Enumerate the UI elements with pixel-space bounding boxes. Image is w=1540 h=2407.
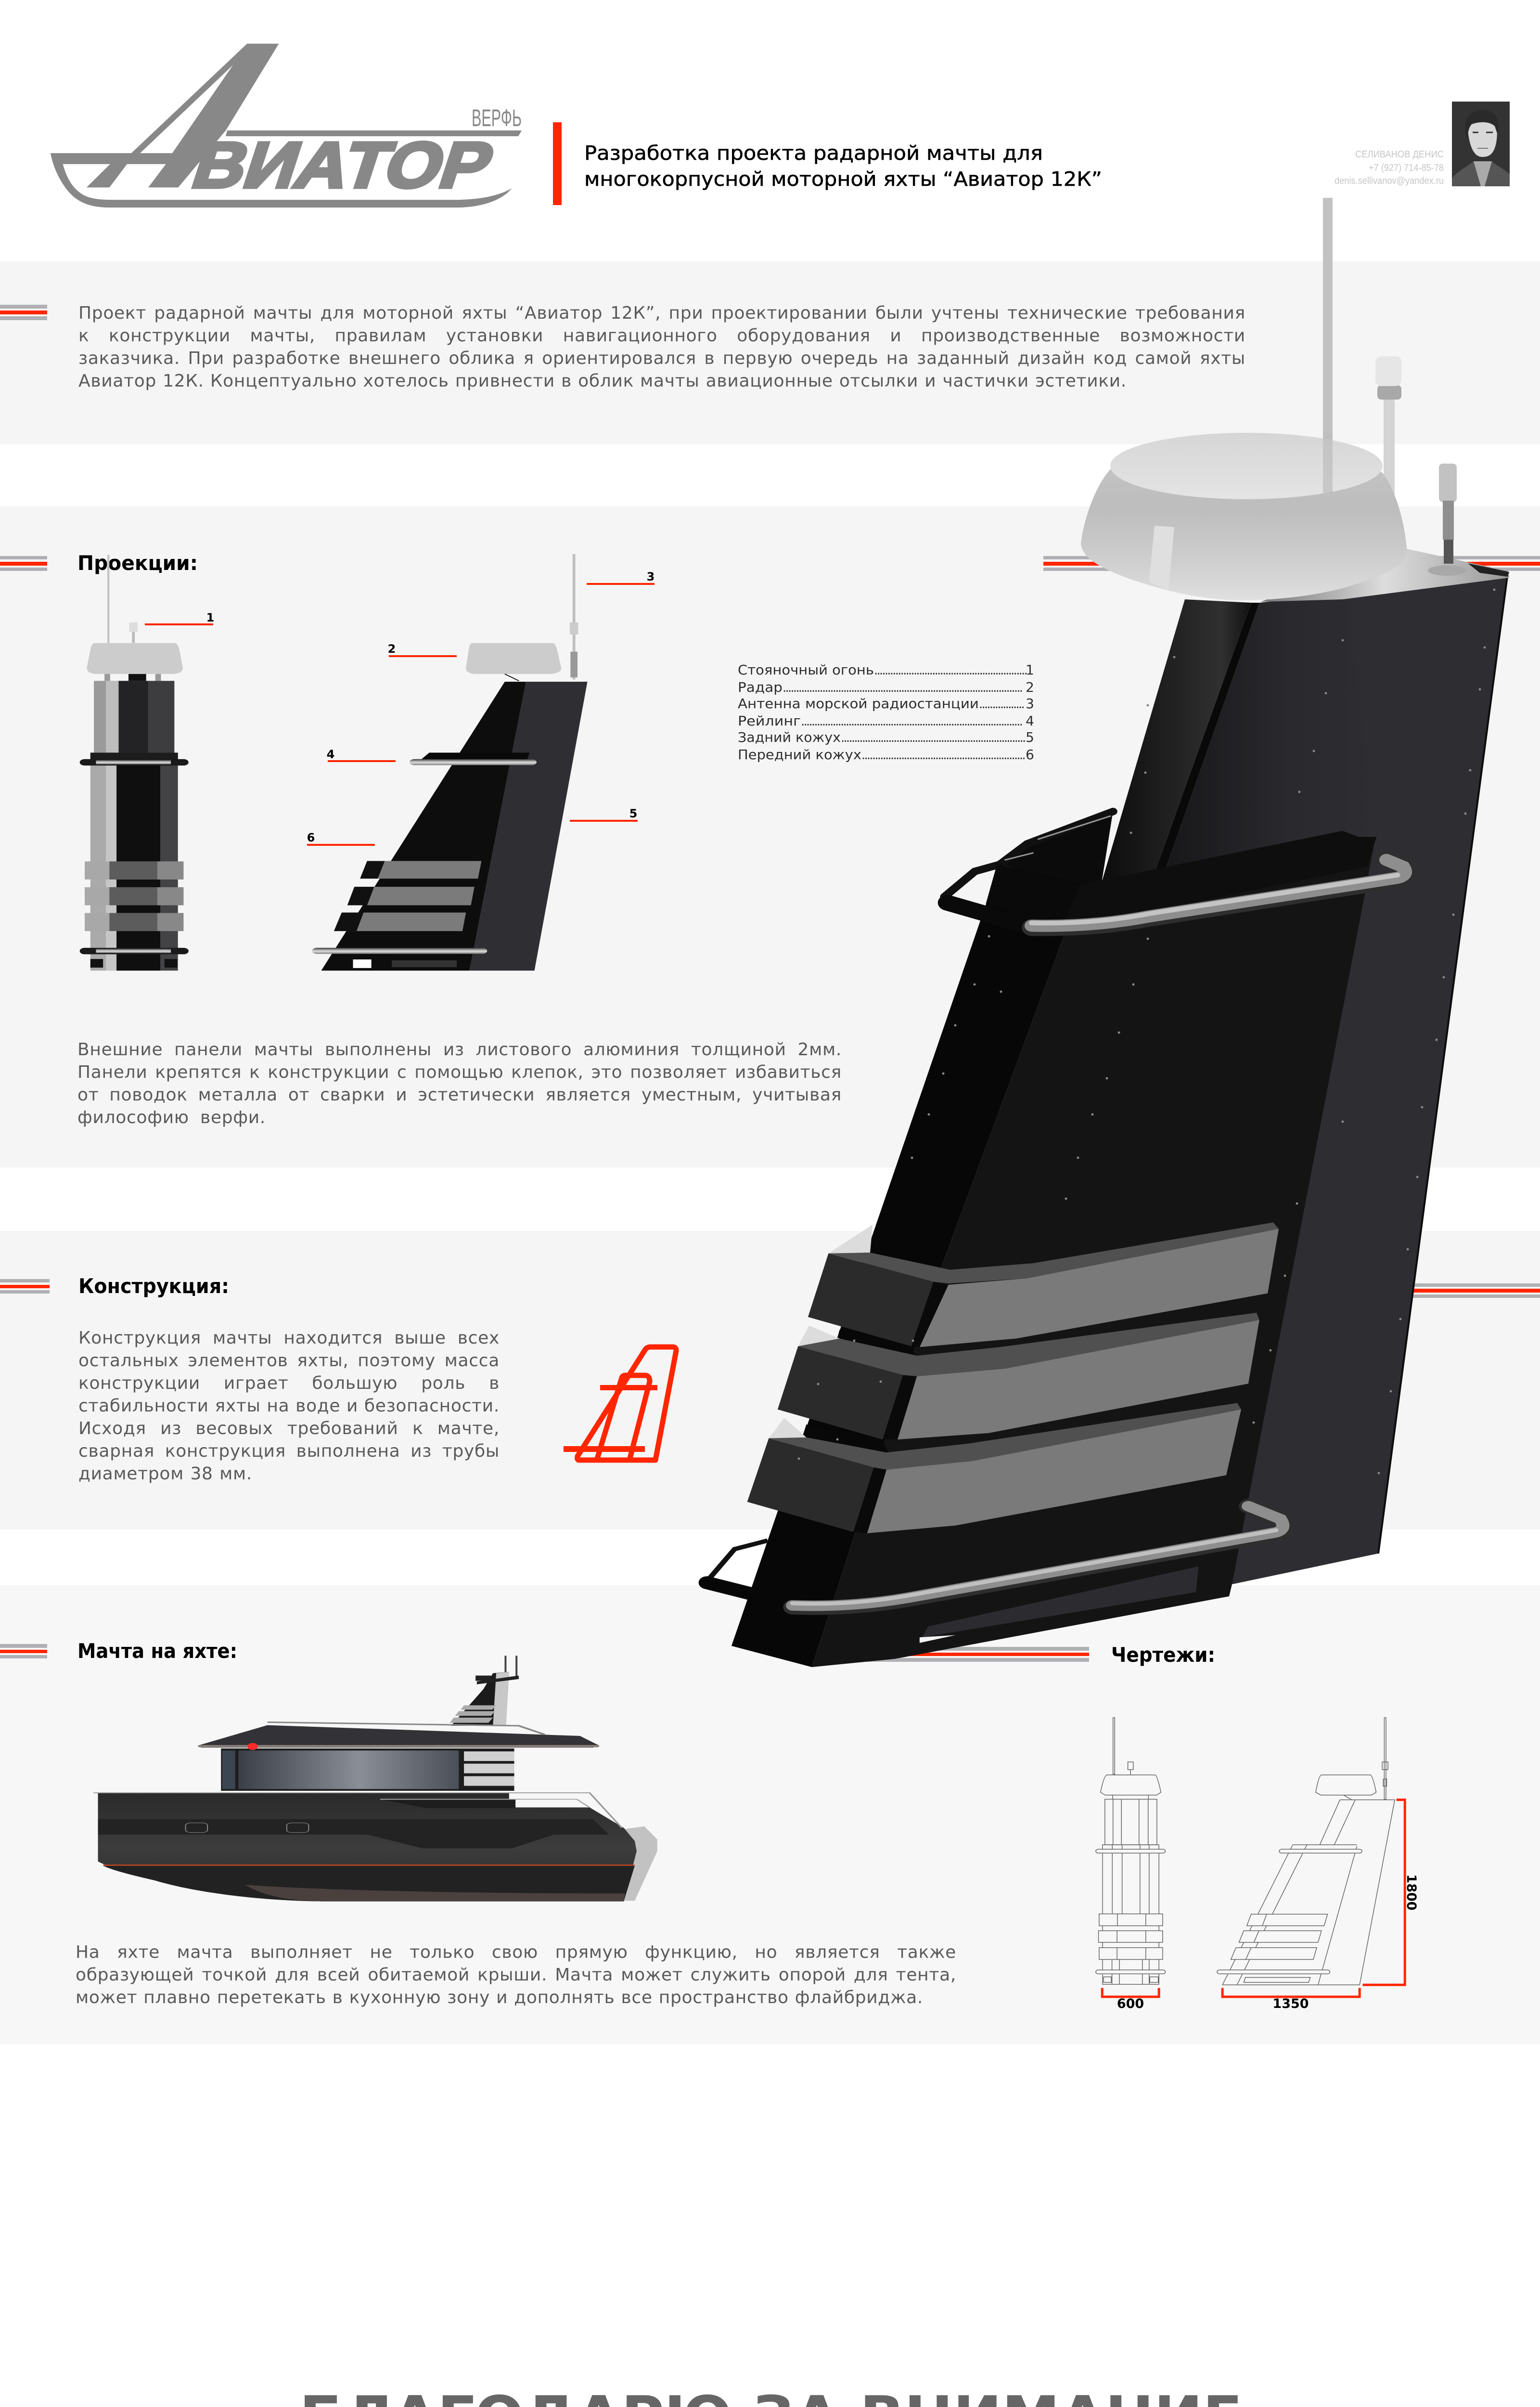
legend: parts list: .............................................................. (861, 748, 1025, 763)
text block: mast on yacht description: На яхте мачта выполняет не только свою прямую функцию, но является также (76, 1942, 956, 1962)
technical drawings (1096, 1718, 1405, 1997)
legend: parts list: ........................................................................................... (783, 681, 1022, 695)
legend: parts list: 3 (1026, 696, 1034, 712)
text block: construction description: Исходя из весовых требований к мачте, (78, 1419, 500, 1438)
text block: mast on yacht description: может плавно перетекать в кухонную зону и дополнять все пространство флайбриджа. (76, 1988, 923, 2007)
text block: panels description: философию верфи. (77, 1108, 266, 1127)
panel: mast on yacht and drawings background (0, 1585, 1540, 2045)
legend: parts list: .......................................................... (874, 663, 1027, 678)
legend: parts list: 2 (1026, 679, 1034, 695)
text block: project intro: к конструкции мачты, правилам установки навигационного оборудования и производственные возможности (78, 326, 1245, 346)
section stripes: drawings (866, 1647, 1089, 1662)
parking light (1375, 356, 1401, 510)
upper rail (947, 903, 1030, 927)
top plate (1261, 546, 1509, 602)
legend: parts list: Передний кожух (738, 747, 861, 763)
title accent bar (553, 122, 562, 205)
dimension labels (1117, 1874, 1419, 2011)
legend: parts list: Стояночный огонь (738, 662, 874, 678)
text block: mast on yacht description: образующей точкой для всей обитаемой крыши. Мачта может служить опорой для тента, (76, 1965, 956, 1985)
text block: construction description: остальных элементов яхты, поэтому масса (78, 1351, 500, 1371)
contacts: +7 (927) 714-85-78 (1369, 163, 1444, 173)
dimension labels: 600 (1117, 1996, 1144, 2011)
legend: parts list (738, 662, 1034, 763)
logo caption: ВЕРФЬ (472, 104, 522, 131)
logo top bar (226, 130, 522, 136)
legend: parts list: Задний кожух (738, 729, 841, 745)
legend: parts list: 6 (1026, 747, 1034, 763)
grey fins (707, 1222, 1284, 1643)
upper neck left side (1102, 599, 1251, 881)
red nav light (247, 1743, 258, 1750)
antenna of marine radio (1323, 198, 1333, 506)
front body: left face (732, 865, 1083, 1667)
text block: panels description (77, 1040, 842, 1127)
title: Разработка проекта радарной мачты для (584, 142, 1043, 165)
legend: parts list: 4 (1026, 713, 1034, 729)
section stripes: intro (0, 305, 47, 320)
dimension brackets (1102, 1800, 1405, 1997)
logo: Aviator shipyard (51, 44, 522, 207)
hull (98, 1793, 637, 1902)
heading: mast on yacht: Мачта на яхте: (77, 1639, 237, 1663)
back rail of upper tray (945, 812, 1113, 897)
legend: parts list: ...................................................................... (841, 731, 1025, 745)
text block: project intro: Проект радарной мачты для моторной яхты “Авиатор 12К”, при проектировании были учтены технические требования (78, 303, 1245, 323)
legend: parts list: ................. (979, 697, 1024, 712)
callout lines and numbers: 4 (327, 748, 334, 761)
section stripes: construction left (0, 1279, 50, 1294)
legend: parts list: 1 (1026, 662, 1034, 678)
lower slot (923, 1566, 1199, 1637)
callout lines and numbers: 2 (388, 642, 396, 656)
callout lines and numbers: 5 (629, 807, 637, 820)
legend: parts list: Радар (738, 679, 783, 695)
section stripes: yacht left (0, 1644, 47, 1658)
rivets (911, 588, 1496, 1474)
text block: panels description: Панели крепятся к конструкции с помощью клепок, это позволяет избавиться (77, 1062, 842, 1082)
logo word: ВИАТОР (184, 129, 502, 201)
dimension labels: 1800 (1404, 1874, 1419, 1911)
text block: panels description: от поводок металла от сварки и эстетически является уместным, учитывая (77, 1085, 842, 1105)
heading: construction: Конструкция: (78, 1274, 229, 1298)
small aerial (1428, 464, 1466, 576)
legend: parts list: Рейлинг (738, 713, 801, 729)
section stripes: construction right (1396, 1283, 1540, 1298)
rails (268, 1722, 544, 1734)
heading: projections: Проекции: (77, 551, 198, 575)
front body: main face (812, 837, 1375, 1667)
legend: parts list: 5 (1026, 729, 1034, 745)
front projection of the mast (80, 555, 189, 971)
text block: project intro (78, 303, 1245, 391)
text block: mast on yacht description (76, 1942, 956, 2007)
text block: construction description: Конструкция мачты находится выше всех (78, 1328, 500, 1348)
drawing: front elevation (1096, 1718, 1166, 1984)
callout lines and numbers: 6 (307, 831, 315, 844)
drawing: side elevation (1217, 1718, 1395, 1985)
lower rail (707, 1540, 768, 1581)
upper tray collar (947, 831, 1407, 932)
cabin (221, 1748, 514, 1791)
callout lines and numbers: 3 (647, 570, 654, 583)
panel: projections background (0, 506, 1540, 1167)
dimension labels: 1350 (1272, 1996, 1309, 2011)
roof (198, 1725, 599, 1747)
section stripes: projections left (0, 556, 47, 571)
panel: construction background (0, 1231, 1540, 1529)
yacht side view (93, 1656, 657, 1902)
text block: construction description: сварная конструкция выполнена из трубы (78, 1441, 500, 1461)
text block: project intro: заказчика. При разработке внешнего облика я ориентировался в первую очередь на заданный дизайн код самой яхты (78, 349, 1245, 368)
side projection of the mast (312, 554, 588, 971)
antenna over dome (1323, 433, 1333, 493)
contacts: denis.sellivanov@yandex.ru (1335, 176, 1444, 186)
contacts: СЕЛИВАНОВ ДЕНИС (1355, 149, 1444, 160)
title (584, 142, 1102, 191)
icon: red welded frame (564, 1347, 676, 1460)
contacts (1335, 149, 1444, 186)
large mast render (707, 198, 1509, 1667)
rear panel (1232, 573, 1508, 1584)
yacht mast (450, 1656, 519, 1726)
text block: construction description: диаметром 38 мм. (78, 1464, 252, 1484)
radar dome (1081, 433, 1407, 600)
panel: intro background (0, 261, 1540, 444)
logo emblem: wing and hull (51, 44, 512, 207)
section stripes: projections right (1043, 556, 1540, 571)
text block: construction description (78, 1328, 500, 1484)
callout lines and numbers: 1 (206, 611, 214, 624)
text block: project intro: Авиатор 12К. Концептуально хотелось привнести в облик мачты авиационные отсылки и частички эстетики. (78, 371, 1127, 391)
heading: drawings: Чертежи: (1111, 1643, 1215, 1667)
photo: author portrait (1452, 102, 1510, 186)
legend: parts list: .................................................................................... (801, 714, 1022, 729)
legend: parts list: Антенна морской радиостанции (738, 696, 979, 712)
text block: construction description: конструкции играет большую роль в (78, 1373, 500, 1393)
title: многокорпусной моторной яхты “Авиатор 12К” (584, 168, 1102, 191)
text block: construction description: стабильности яхты на воде и безопасности. (78, 1396, 500, 1416)
stern shadow (622, 1826, 657, 1901)
text block: panels description: Внешние панели мачты выполнены из листового алюминия толщиной 2мм. (77, 1040, 842, 1060)
callout lines and numbers (145, 570, 654, 846)
upper neck right side (1162, 600, 1376, 879)
